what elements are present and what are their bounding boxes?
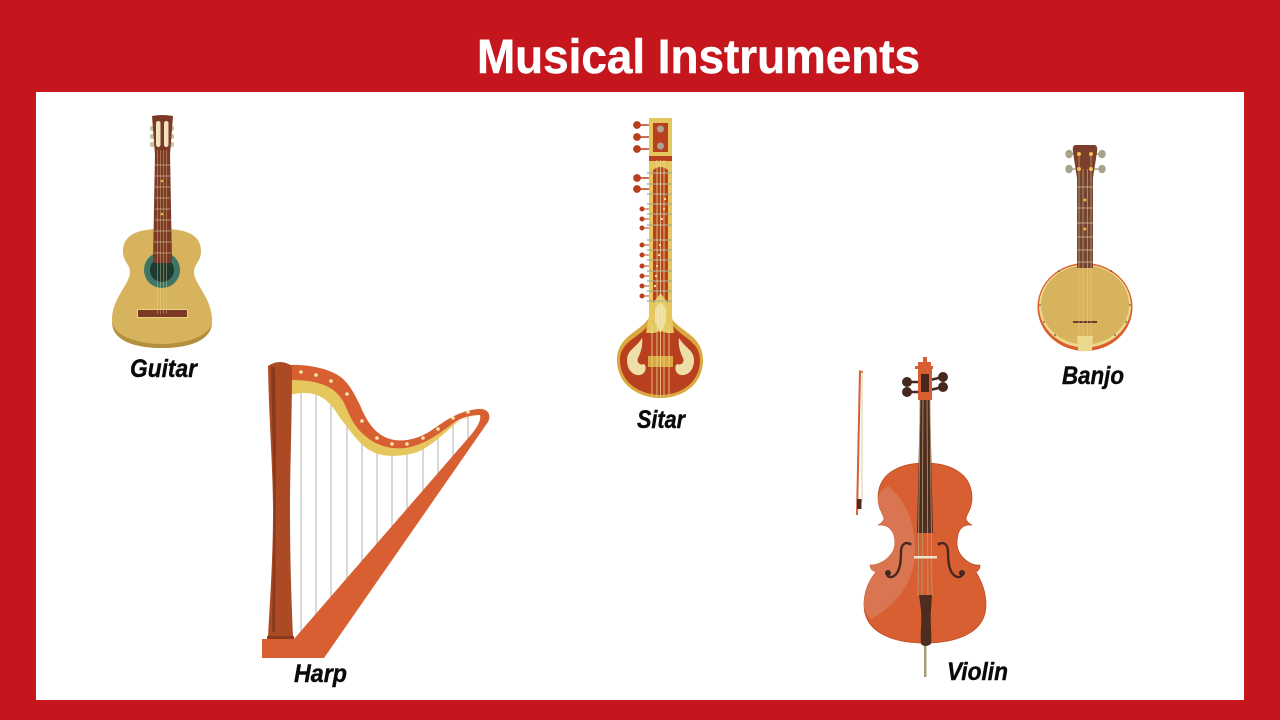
icon: banjo rim bolts — [1039, 270, 1131, 336]
icon: sitar neck inlay — [655, 302, 666, 333]
icon: banjo neck — [1077, 175, 1093, 268]
icon: banjo tailpiece — [1077, 336, 1093, 352]
icon: guitar body — [112, 229, 212, 348]
icon: harp string pins — [299, 370, 470, 446]
icon: banjo tuners — [1077, 152, 1093, 171]
icon: harp pillar shading — [271, 367, 276, 632]
icon: harp strings — [301, 372, 468, 636]
icon: guitar headstock — [152, 115, 173, 155]
icon: sitar peg box — [649, 123, 672, 161]
icon: banjo rim — [1038, 263, 1132, 351]
icon: banjo strings — [1079, 154, 1091, 338]
icon: banjo drum head — [1041, 266, 1129, 344]
icon: banjo tuning pegs — [1066, 150, 1105, 172]
icon: violin body — [864, 463, 986, 643]
icon: banjo frets — [1077, 187, 1093, 262]
label: banjo: Banjo — [1062, 362, 1124, 390]
icon: sitar fret dots — [654, 198, 666, 287]
icon: sitar left body ornament — [627, 338, 646, 375]
icon: sitar fretboard — [653, 167, 668, 303]
icon: violin strings — [918, 400, 932, 596]
white content panel — [36, 92, 1244, 700]
icon: sitar frets — [647, 173, 672, 301]
icon: violin left f-hole — [885, 542, 912, 577]
icon: harp pillar — [268, 362, 293, 637]
icon: violin right f-hole — [938, 542, 965, 577]
icon: violin pegs — [902, 372, 948, 396]
icon: guitar headstock slots — [156, 121, 168, 147]
label: violin: Violin — [947, 658, 1008, 686]
icon: guitar strings — [158, 150, 166, 314]
icon: violin bridge — [914, 556, 937, 558]
icon: violin pegbox slots — [921, 374, 929, 392]
icon: guitar frets — [154, 165, 171, 253]
icon: guitar fret dots — [161, 180, 163, 215]
label: guitar: Guitar — [130, 355, 198, 383]
icon: guitar tuning pegs — [150, 126, 174, 147]
icon: sitar neck — [649, 118, 672, 323]
icon: harp yellow soundboard band — [290, 378, 480, 456]
icon: violin body highlight — [864, 486, 915, 619]
icon: banjo bridge — [1073, 321, 1097, 323]
instrument: sitar — [617, 118, 703, 434]
icon: sitar small pegs — [640, 207, 649, 298]
instrument: violin with bow — [857, 357, 1008, 686]
icon: banjo rim inner — [1039, 264, 1131, 348]
icon: sitar body — [617, 319, 703, 398]
icon: sitar strings — [652, 160, 669, 396]
icon: bow — [857, 371, 863, 515]
icon: violin end pin — [924, 646, 926, 677]
icon: harp neck and diagonal frame — [262, 365, 489, 658]
instrument: harp — [262, 362, 489, 688]
icon: violin tailpiece — [919, 595, 932, 646]
icon: sitar neck collar — [646, 316, 674, 333]
instrument: guitar — [112, 115, 212, 383]
icon: sitar large pegs — [634, 122, 649, 192]
title: Musical Instruments — [477, 31, 920, 84]
icon: harp pillar foot — [267, 636, 294, 639]
icon: violin fingerboard — [917, 400, 933, 533]
icon: sitar bridge — [648, 356, 673, 367]
icon: banjo headstock — [1073, 145, 1097, 178]
icon: sitar body inner — [620, 326, 700, 395]
icon: sitar right body ornament — [675, 338, 694, 375]
icon: violin scroll and pegbox — [915, 357, 933, 400]
instrument: banjo — [1038, 145, 1132, 390]
icon: guitar sound hole — [144, 252, 180, 288]
icon: guitar body shadow — [112, 322, 212, 348]
icon: banjo fret dots — [1084, 198, 1086, 230]
icon: guitar neck — [153, 153, 172, 263]
label: sitar: Sitar — [637, 406, 686, 434]
icon: guitar bridge — [138, 310, 188, 318]
label: harp: Harp — [294, 660, 347, 688]
